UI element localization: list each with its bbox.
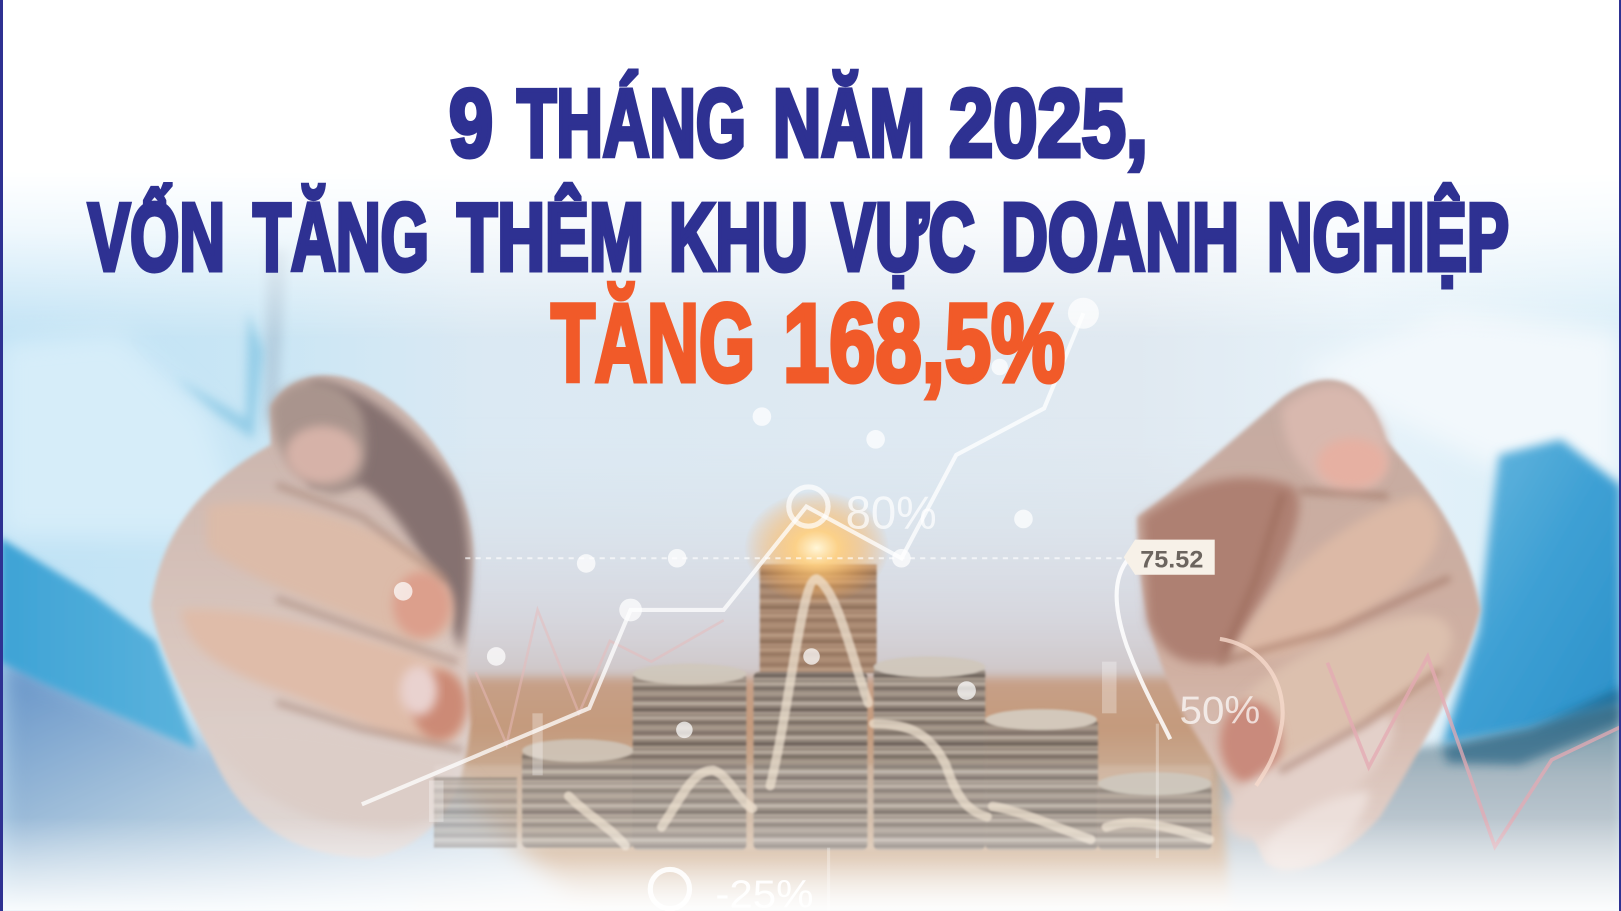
right finger separators bbox=[1220, 491, 1447, 770]
right thumb tip bbox=[1317, 438, 1387, 488]
left hand bbox=[151, 375, 473, 858]
marker ring bbox=[789, 487, 828, 526]
right thumb bbox=[1282, 385, 1388, 494]
right middle fingertip bbox=[1220, 701, 1282, 784]
right index finger bbox=[1235, 496, 1439, 657]
price tag 75.52 bbox=[1124, 540, 1215, 575]
left middle nail bbox=[400, 666, 437, 715]
table surface left bbox=[0, 651, 579, 911]
right palm shadow bbox=[1142, 478, 1299, 663]
percent arc on right hand bbox=[1220, 639, 1283, 786]
coin stack soft sheen bbox=[434, 765, 1212, 850]
coin stack 6 bbox=[985, 709, 1098, 850]
coin stack 3 bbox=[633, 664, 746, 850]
pink zigzag chart line bbox=[1327, 656, 1621, 847]
price tag 75.52: 75.52 bbox=[1140, 547, 1203, 574]
title line 2: VỰC bbox=[832, 184, 975, 291]
right ring finger bbox=[1225, 713, 1393, 840]
right hand silhouette bbox=[1137, 380, 1480, 868]
shirt placket fold left bbox=[264, 248, 287, 434]
left index fingertip bbox=[393, 572, 451, 638]
left middle finger bbox=[181, 609, 464, 743]
white curve from price tag bbox=[1117, 558, 1170, 739]
title line 2: THÊM bbox=[457, 183, 644, 291]
coin stack 7 bbox=[1098, 772, 1212, 850]
trend line bbox=[362, 313, 1083, 804]
title line 2: KHU bbox=[669, 184, 808, 291]
title line 2: VỐN bbox=[88, 183, 225, 291]
dashed level line bbox=[465, 557, 1127, 559]
title line 3 highlight bbox=[551, 282, 1065, 405]
title line 3 highlight: 168,5% bbox=[783, 282, 1065, 405]
marker ring near -25% bbox=[650, 869, 690, 909]
right little finger bbox=[1266, 791, 1370, 870]
title bbox=[88, 70, 1509, 405]
top white fade behind title bbox=[0, 0, 1621, 340]
title line 1: THÁNG bbox=[517, 70, 746, 177]
left thumb bbox=[271, 381, 367, 494]
marker dots bbox=[394, 298, 1099, 738]
left hand silhouette bbox=[151, 375, 473, 858]
left faint pink candlestick lines bbox=[476, 610, 724, 744]
left finger separators bbox=[279, 486, 460, 750]
title line 1: NĂM bbox=[773, 70, 925, 177]
title line 1 bbox=[449, 70, 1148, 177]
title line 2 bbox=[88, 183, 1509, 291]
faint vertical candle bars bbox=[429, 662, 1159, 911]
left blue cuff bbox=[0, 538, 196, 750]
coin stack 1 bbox=[434, 777, 517, 848]
title line 3 highlight: TĂNG bbox=[551, 282, 755, 405]
right hand bbox=[1137, 380, 1480, 870]
coin stack 5 bbox=[874, 656, 985, 850]
label 80%: 80% bbox=[846, 486, 937, 538]
table surface right bbox=[1220, 703, 1621, 911]
left palm shadow bbox=[310, 382, 470, 651]
right shirt fold bbox=[1297, 310, 1621, 486]
coin stack 2 bbox=[522, 739, 634, 848]
title line 2: DOANH bbox=[1001, 184, 1239, 291]
right sleeve dark shadow bbox=[1442, 687, 1621, 765]
left shirt fold bbox=[0, 331, 248, 538]
white trend line with markers bbox=[362, 298, 1127, 804]
left thumb tip bbox=[285, 426, 360, 484]
left ring finger bbox=[207, 726, 455, 832]
left middle fingertip bbox=[412, 670, 466, 740]
title line 1: 9 bbox=[449, 70, 493, 177]
right blue cuff bbox=[1442, 439, 1621, 744]
left sleeve teal shade bbox=[119, 310, 264, 439]
shirt lower shade bbox=[310, 434, 1323, 703]
coin stacks bbox=[434, 564, 1212, 850]
title line 1: 2025, bbox=[949, 70, 1148, 177]
table surface centre bbox=[414, 677, 1251, 911]
coin stack 4 tall bbox=[754, 564, 877, 850]
cream wave overlay on coins bbox=[569, 579, 1210, 846]
bottom white fade bbox=[0, 817, 1621, 911]
glow above tall stack bbox=[744, 491, 889, 605]
title line 2: TĂNG bbox=[253, 184, 429, 291]
right middle finger bbox=[1225, 615, 1452, 777]
label 50%: 50% bbox=[1180, 689, 1260, 733]
left index finger bbox=[207, 503, 453, 642]
